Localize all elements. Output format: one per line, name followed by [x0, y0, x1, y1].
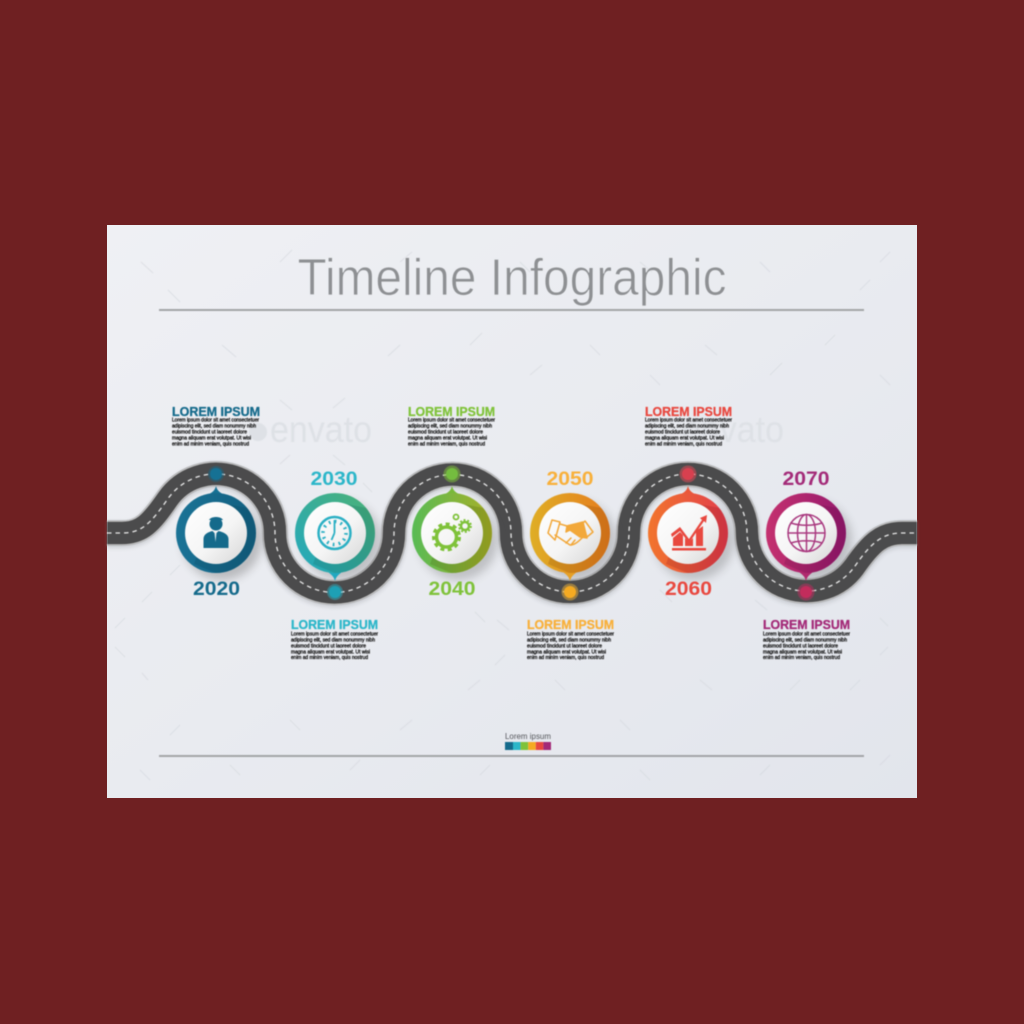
node: 2040 road marker [444, 466, 460, 482]
step 2030 [291, 469, 381, 661]
node: 2050 road marker [562, 584, 578, 600]
step 2070 [763, 469, 852, 661]
label: 2030 heading and text: magna aliquam erat volutpat. Ut wisi [291, 650, 370, 656]
label: 2020 heading and text [172, 404, 260, 448]
badge: 2050 ring [530, 493, 616, 581]
icon: gears [434, 514, 471, 550]
node: 2060 road marker [680, 466, 696, 482]
label: 2030 heading and text: enim ad minim veniam, quis nostrud [291, 655, 368, 661]
label: 2030 heading and text: LOREM IPSUM [291, 617, 378, 632]
label: 2050 heading and text: Lorem ipsum dolor sit amet consectetuer [527, 632, 614, 638]
label: 2040 heading and text: euismod tincidunt ut laoreet dolore [408, 430, 483, 436]
icon: clock [318, 517, 350, 549]
icon: businessman [204, 517, 228, 548]
label: 2070 heading and text: euismod tincidunt ut laoreet dolore [763, 644, 838, 650]
label: 2020 heading and text: adipiscing elit, sed diam nonummy nibh [172, 424, 256, 430]
year: 2040: 2040 [428, 579, 476, 600]
node: 2020 road marker [208, 466, 224, 482]
label: 2060 heading and text: LOREM IPSUM [645, 404, 732, 419]
label: 2040 heading and text: LOREM IPSUM [408, 404, 495, 419]
legend: color key [505, 731, 551, 750]
label: 2050 heading and text: euismod tincidunt ut laoreet dolore [527, 644, 602, 650]
title: Timeline Infographic [298, 249, 726, 307]
label: 2030 heading and text: adipiscing elit, sed diam nonummy nibh [291, 638, 375, 644]
step 2050 [527, 469, 616, 661]
label: 2030 heading and text: Lorem ipsum dolor sit amet consectetuer [291, 632, 378, 638]
badge: 2020 ring [176, 486, 262, 580]
label: 2070 heading and text: enim ad minim veniam, quis nostrud [763, 655, 840, 661]
year: 2070: 2070 [782, 469, 830, 490]
panel: infographic background [107, 225, 917, 798]
label: 2060 heading and text: magna aliquam erat volutpat. Ut wisi [645, 436, 724, 442]
label: 2040 heading and text [408, 404, 495, 448]
label: 2050 heading and text: adipiscing elit, sed diam nonummy nibh [527, 638, 611, 644]
label: 2060 heading and text: enim ad minim veniam, quis nostrud [645, 442, 722, 448]
label: 2070 heading and text [763, 617, 850, 661]
label: 2040 heading and text: magna aliquam erat volutpat. Ut wisi [408, 436, 487, 442]
watermark: envato left: envato [270, 409, 372, 450]
label: 2060 heading and text: adipiscing elit, sed diam nonummy nibh [645, 424, 729, 430]
badge: 2030 ring [295, 493, 381, 581]
label: 2020 heading and text: magna aliquam erat volutpat. Ut wisi [172, 436, 251, 442]
label: 2030 heading and text: euismod tincidunt ut laoreet dolore [291, 644, 366, 650]
year: 2020: 2020 [193, 579, 240, 600]
label: 2040 heading and text: enim ad minim veniam, quis nostrud [408, 442, 485, 448]
badge: 2040 ring [412, 486, 498, 580]
label: 2030 heading and text [291, 617, 378, 661]
label: 2060 heading and text [645, 404, 732, 448]
label: 2070 heading and text: LOREM IPSUM [763, 617, 850, 632]
label: 2070 heading and text: magna aliquam erat volutpat. Ut wisi [763, 650, 842, 656]
label: 2020 heading and text: enim ad minim veniam, quis nostrud [172, 442, 249, 448]
label: 2060 heading and text: Lorem ipsum dolor sit amet consectetuer [645, 418, 732, 424]
label: 2040 heading and text: Lorem ipsum dolor sit amet consectetuer [408, 418, 495, 424]
icon: globe [788, 514, 825, 552]
winding road [107, 474, 917, 595]
icon: growth chart [671, 515, 707, 550]
label: 2050 heading and text: magna aliquam erat volutpat. Ut wisi [527, 650, 606, 656]
badge: 2070 ring [766, 493, 852, 581]
node: 2030 road marker [327, 584, 343, 600]
bottom divider [159, 755, 864, 757]
step 2060 [645, 404, 734, 600]
legend: color key: Lorem ipsum [505, 731, 551, 741]
label: 2050 heading and text [527, 617, 614, 661]
label: 2020 heading and text: euismod tincidunt ut laoreet dolore [172, 430, 247, 436]
step 2040 [408, 404, 498, 600]
label: 2040 heading and text: adipiscing elit, sed diam nonummy nibh [408, 424, 492, 430]
step 2020 [172, 404, 262, 600]
label: 2050 heading and text: LOREM IPSUM [527, 617, 614, 632]
year: 2030: 2030 [310, 469, 358, 490]
label: 2020 heading and text: Lorem ipsum dolor sit amet consectetuer [172, 418, 259, 424]
label: 2020 heading and text: LOREM IPSUM [172, 404, 260, 419]
icon: handshake [548, 520, 593, 545]
year: 2050: 2050 [546, 469, 594, 490]
label: 2060 heading and text: euismod tincidunt ut laoreet dolore [645, 430, 720, 436]
label: 2070 heading and text: Lorem ipsum dolor sit amet consectetuer [763, 632, 850, 638]
year: 2060: 2060 [665, 579, 712, 600]
top divider [159, 309, 864, 311]
watermark: envato right: envato [682, 409, 784, 450]
badge: 2060 ring [648, 486, 734, 580]
label: 2070 heading and text: adipiscing elit, sed diam nonummy nibh [763, 638, 847, 644]
node: 2070 road marker [798, 584, 814, 600]
label: 2050 heading and text: enim ad minim veniam, quis nostrud [527, 655, 604, 661]
